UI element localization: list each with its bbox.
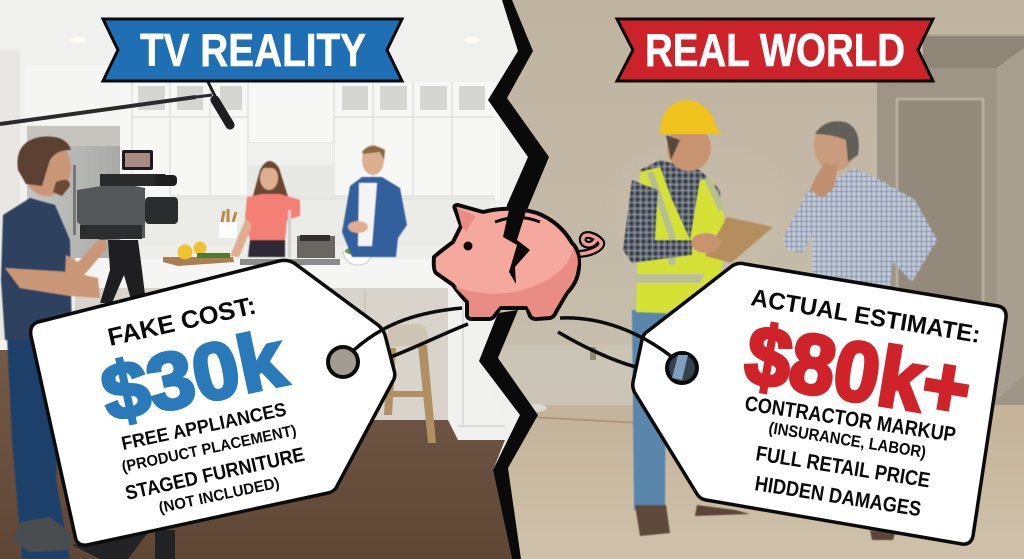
fridge (27, 126, 120, 271)
pig belly shading (455, 247, 578, 317)
banner: TV reality (103, 19, 402, 81)
coin slot (495, 218, 540, 222)
pig eye (464, 242, 472, 250)
wood floor (0, 350, 512, 559)
line: not included: (NOT INCLUDED) (157, 475, 281, 517)
upper cabinets (25, 65, 500, 205)
boom microphone (0, 82, 230, 125)
line: free appliances: FREE APPLIANCES (120, 399, 288, 455)
homeowner with hand on mouth (783, 121, 937, 540)
price tag: actual estimate (633, 263, 1006, 544)
TV camera on tripod (72, 150, 178, 559)
tag hole (667, 353, 697, 383)
contractor in hard hat (623, 100, 773, 536)
backsplash (140, 200, 490, 260)
tag shape (31, 260, 395, 545)
jagged crack divider (479, 0, 549, 559)
line: insurance, labor: (INSURANCE, LABOR) (767, 419, 927, 462)
tag hole (328, 347, 358, 377)
label: fake cost: FAKE COST: (105, 292, 259, 352)
stove and cutting board on counter (163, 209, 372, 266)
banner title: TV REALITY (140, 24, 366, 76)
line: staged furniture: STAGED FURNITURE (123, 444, 307, 505)
banner: real world (617, 19, 933, 81)
panel: real world construction site background (480, 0, 1024, 559)
tag shape (633, 263, 1006, 544)
line: hidden damages: HIDDEN DAMAGES (753, 472, 923, 521)
string: right tag lower (558, 332, 636, 367)
line: product placement: (PRODUCT PLACEMENT) (120, 422, 298, 476)
amount: $80k+: $80k+ (739, 307, 977, 437)
line: contractor markup: CONTRACTOR MARKUP (743, 392, 957, 447)
banner title: REAL WORLD (645, 24, 905, 76)
bar stool (380, 324, 436, 443)
panel: TV reality staged kitchen background (0, 0, 528, 559)
string: left tag upper (354, 308, 462, 350)
island counter and base (75, 245, 505, 440)
pig tail (577, 235, 601, 254)
amount: $30k: $30k (94, 313, 293, 439)
ceiling lights (70, 38, 480, 42)
pig body (434, 205, 579, 319)
price tag: fake cost (31, 260, 395, 545)
string: right tag upper (560, 318, 672, 357)
crack through pig (503, 205, 530, 284)
label: actual estimate: ACTUAL ESTIMATE: (749, 284, 982, 349)
line: full retail price: FULL RETAIL PRICE (754, 442, 932, 492)
icon: cracked piggy bank (434, 205, 601, 319)
string: left tag lower (388, 324, 468, 358)
TV host: man in blue blazer (342, 145, 407, 257)
pig ear (457, 208, 476, 232)
camera operator (1, 137, 107, 559)
TV host: woman (230, 161, 300, 258)
kitchen wall left (0, 50, 20, 340)
